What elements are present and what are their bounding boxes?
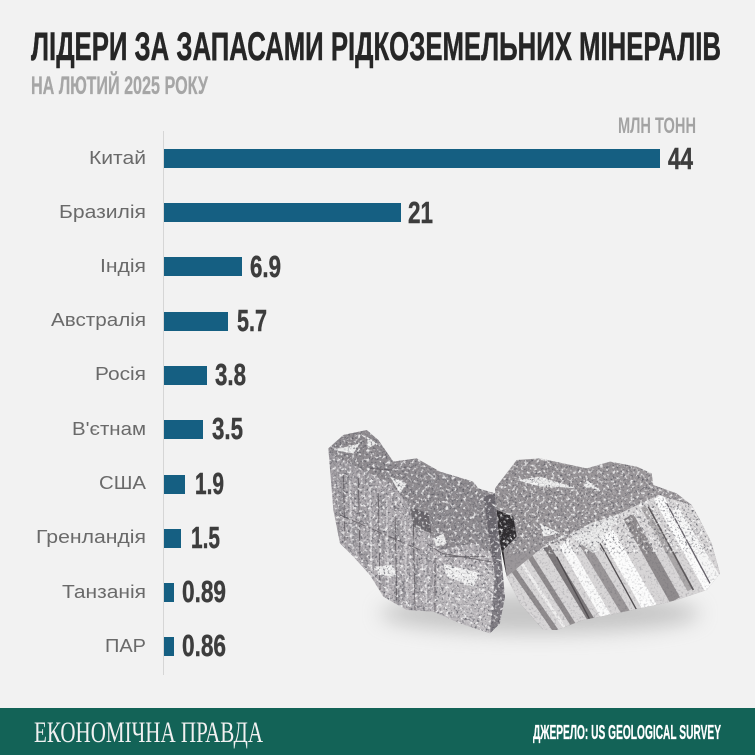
row: США: [99, 466, 224, 501]
row: Індія: Індія: [100, 256, 146, 276]
row: США: США: [99, 473, 146, 493]
row: Гренландія: Гренландія: [36, 527, 146, 547]
row: Танзанія: 0.89: [182, 574, 226, 609]
row: Гренландія: [36, 520, 220, 555]
row: Росія: 3.8: [215, 357, 246, 392]
row: Бразилія: Бразилія: [59, 202, 146, 222]
right rock: [495, 458, 720, 630]
row: Китай: Китай: [89, 148, 146, 168]
row: Австралія: 5.7: [237, 303, 267, 338]
row: Індія: [100, 249, 281, 284]
row: США: 1.9: [195, 466, 224, 501]
row: Китай: 44: [668, 141, 694, 176]
axis line: [163, 131, 164, 675]
row: Індія: 6.9: [250, 249, 281, 284]
row: ПАР: ПАР: [105, 636, 146, 656]
footer: [0, 708, 755, 755]
row: Китай: [89, 141, 694, 176]
subtitle: НА ЛЮТИЙ 2025 РОКУ: [31, 70, 208, 100]
left rock: [328, 430, 505, 634]
image: rare-earth mineral rocks: [320, 423, 727, 640]
row: Танзанія: Танзанія: [62, 582, 146, 602]
row: ПАР: [105, 628, 226, 663]
row: Росія: Росія: [95, 364, 146, 384]
row: Бразилія: 21: [408, 195, 433, 230]
row: Танзанія: [62, 574, 226, 609]
bar chart: [36, 141, 694, 663]
unit label: МЛН ТОНН: [618, 113, 696, 138]
row: В'єтнам: 3.5: [212, 411, 243, 446]
row: Бразилія: [59, 195, 433, 230]
row: Росія: [95, 357, 246, 392]
row: Австралія: [51, 303, 267, 338]
rock shadow: [380, 593, 700, 633]
logo: Економічна правда: ЕКОНОМІЧНА ПРАВДА: [34, 716, 263, 749]
row: ПАР: 0.86: [182, 628, 226, 663]
row: В'єтнам: В'єтнам: [72, 419, 146, 439]
row: В'єтнам: [72, 411, 243, 446]
row: Гренландія: 1.5: [191, 520, 220, 555]
row: Австралія: Австралія: [51, 310, 146, 330]
